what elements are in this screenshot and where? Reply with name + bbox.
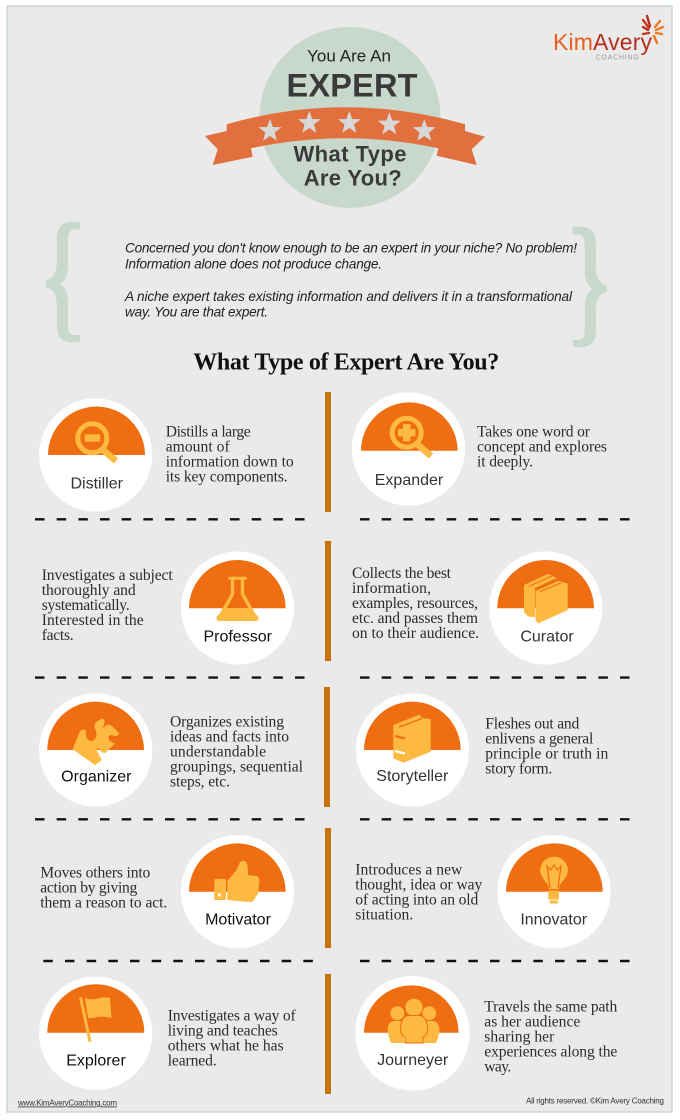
panel: Explorer: learned. [168,1053,217,1070]
icon: magnifier minus [78,424,116,461]
intro text [124,241,577,320]
panel: Curator: examples, resources, [352,595,478,612]
panel: Storyteller: Fleshes out and [485,715,580,732]
panel: Journeyer: as her audience [484,1014,580,1031]
panel: Motivator: Motivator [205,911,272,928]
panel: Organizer: groupings, sequential [170,759,304,776]
footer: website link: www.KimAveryCoaching.com [17,1098,117,1108]
icon: magnifier plus [392,418,431,456]
panel: Journeyer [355,976,618,1091]
panel: Curator: etc. and passes them [352,610,478,627]
panel: Journeyer: Travels the same path [484,999,618,1016]
panel: Storyteller: enlivens a general [485,730,594,747]
right brace [573,227,607,347]
icon: flag [80,997,112,1042]
panel: Distiller [39,398,294,512]
panel: Professor: Professor [203,629,273,646]
icon: flask [216,578,259,621]
icon: book [393,714,431,763]
footer: copyright: All rights reserved. ©Kim Avery Coaching [526,1096,664,1106]
panel: Expander: it deeply. [477,454,533,471]
logo: Kim Avery Coaching: KimAvery [553,29,652,55]
intro text: Concerned you don't know enough to be an expert in your niche? No problem! [125,241,577,256]
logo: Kim Avery Coaching [553,16,663,61]
panel: Innovator: Innovator [520,911,588,928]
panel: Curator: Curator [520,629,574,646]
panel: Explorer: living and teaches [168,1023,278,1040]
header badge: EXPERT [286,68,418,104]
panel: Expander [352,392,607,506]
panel: Motivator: action by giving [40,879,138,896]
panel: Curator [352,551,602,665]
panel: Organizer: ideas and facts into [170,729,289,746]
icon: thumbs up [214,861,259,902]
panel: Organizer: steps, etc. [170,774,230,791]
panel: Storyteller [356,693,609,807]
panel: Organizer: Organizes existing [170,714,284,731]
logo: Kim Avery Coaching: COACHING [596,54,639,61]
panel: Expander: Expander [375,472,444,489]
icon: puzzle piece [73,718,119,765]
icon: books [524,574,568,624]
panel: Distiller: amount of [166,439,230,456]
panel: Distiller: Distills a large [166,424,251,441]
icon: light bulb [540,857,568,904]
panel: Explorer: others what he has [168,1038,284,1055]
panel: Storyteller: principle or truth in [485,745,609,762]
panel: Journeyer: sharing her [484,1029,555,1046]
intro text: Information alone does not produce change. [125,256,382,271]
header badge [205,27,485,208]
panel: Organizer [39,693,304,807]
panel: Motivator: Moves others into [40,864,151,881]
panel: Explorer: Explorer [66,1053,126,1070]
panel: Innovator: situation. [355,906,413,923]
left brace [46,222,80,342]
panel: Innovator: of acting into an old [355,891,479,908]
panel: Professor: systematically. [42,597,130,614]
panel: Professor: thoroughly and [42,582,136,599]
panel: Distiller: information down to [166,454,294,471]
intro text: A niche expert takes existing information and delivers it in a transformational [124,289,573,304]
header badge: You Are An [307,47,391,66]
panel: Storyteller: story form. [485,760,552,777]
panel: Innovator [355,835,611,948]
panel: Innovator: thought, idea or way [355,876,483,893]
panel: Distiller: its key components. [166,469,288,486]
panel: Storyteller: Storyteller [376,768,449,785]
panel: Professor: facts. [42,627,74,644]
panel: Professor: Investigates a subject [42,567,173,584]
panel: Curator: information, [352,580,431,597]
panel: Organizer: understandable [170,744,266,761]
panel: Motivator: them a reason to act. [40,894,167,911]
panel: Expander: concept and explores [477,439,607,456]
panel: Curator: on to their audience. [352,625,479,642]
header badge: What Type [294,142,406,167]
panel: Professor [42,551,294,665]
panel: Journeyer: Journeyer [377,1052,449,1069]
panel: Journeyer: way. [484,1059,511,1076]
panel: Organizer: Organizer [61,769,132,786]
panel: Explorer [39,977,296,1090]
panel: Distiller: Distiller [70,476,124,493]
panel: Professor: Interested in the [42,612,144,629]
panel: Motivator [40,835,294,948]
section heading: What Type of Expert Are You? [193,349,499,375]
panel: Expander: Takes one word or [477,424,591,441]
icon: people [388,999,440,1043]
intro text: way. You are that expert. [125,305,268,320]
panel: Curator: Collects the best [352,565,452,582]
panel: Innovator: Introduces a new [355,861,463,878]
header badge: Are You? [304,165,402,190]
panel: Journeyer: experiences along the [484,1044,617,1061]
panel: Explorer: Investigates a way of [168,1008,296,1025]
